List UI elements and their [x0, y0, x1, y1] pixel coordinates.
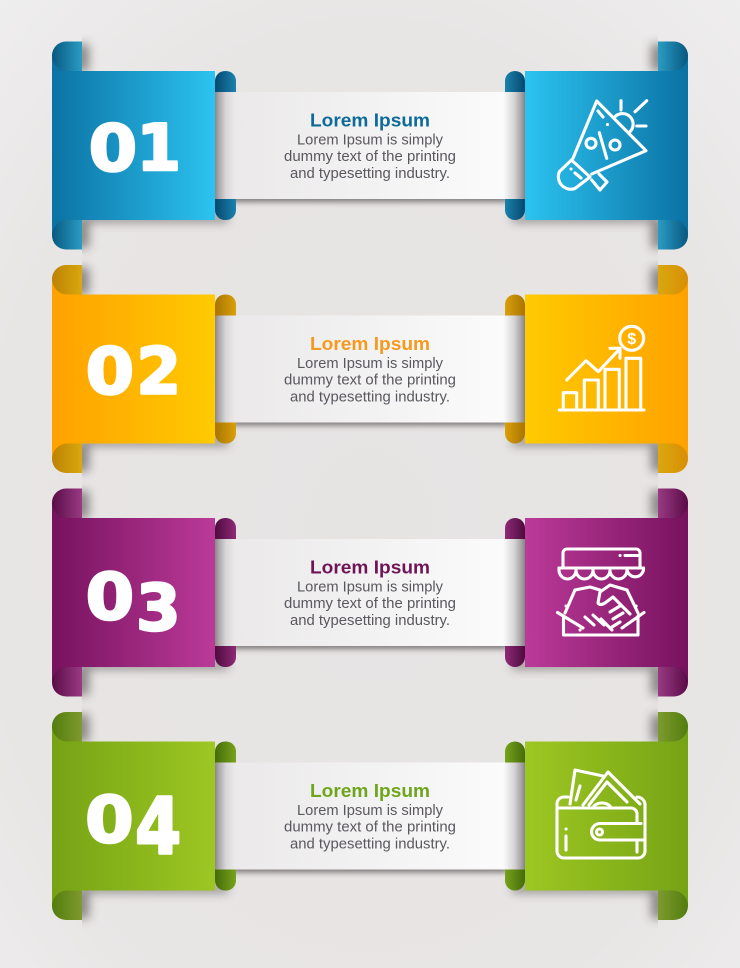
- text block: [284, 803, 456, 852]
- heading: Lorem Ipsum: [310, 780, 430, 801]
- icon: megaphone: [558, 101, 647, 190]
- number 04: 0: [85, 782, 134, 857]
- text block: dummy text of the printing: [284, 596, 456, 612]
- heading: Lorem Ipsum: [310, 333, 430, 354]
- text block: and typesetting industry.: [290, 390, 450, 406]
- heading: Lorem Ipsum: [310, 110, 430, 130]
- number 03: 0: [86, 559, 134, 634]
- panel: row 01: [52, 42, 688, 250]
- icon: growth chart: $: [627, 331, 636, 348]
- heading: Lorem Ipsum: [310, 556, 430, 578]
- text block: Lorem Ipsum is simply: [297, 356, 444, 372]
- number 02: 0: [86, 334, 134, 409]
- number 03: [86, 559, 181, 646]
- icon: shop and handshake: [558, 549, 644, 635]
- number 01: [89, 111, 181, 186]
- text block: and typesetting industry.: [290, 613, 450, 629]
- text block: and typesetting industry.: [290, 166, 450, 182]
- number 04: 4: [135, 782, 181, 872]
- text block: [284, 356, 456, 406]
- panel: row 03: [52, 488, 688, 696]
- text block: dummy text of the printing: [284, 820, 456, 836]
- text block: and typesetting industry.: [290, 836, 450, 852]
- number 01: 1: [136, 112, 181, 186]
- text block: Lorem Ipsum is simply: [297, 579, 444, 595]
- panel: row 02: [52, 265, 688, 473]
- text block: [284, 579, 456, 629]
- number 02: 2: [136, 336, 181, 410]
- icon: growth chart: [559, 326, 644, 410]
- number 03: 3: [136, 572, 181, 646]
- panel: row 04: [52, 712, 688, 920]
- icon: wallet: [557, 770, 645, 858]
- number 04: [85, 782, 181, 872]
- text block: Lorem Ipsum is simply: [297, 803, 444, 819]
- text block: [284, 132, 456, 182]
- text block: Lorem Ipsum is simply: [297, 132, 444, 148]
- number 01: 0: [89, 111, 137, 186]
- text block: dummy text of the printing: [284, 149, 456, 165]
- text block: dummy text of the printing: [284, 372, 456, 388]
- number 02: [86, 334, 181, 410]
